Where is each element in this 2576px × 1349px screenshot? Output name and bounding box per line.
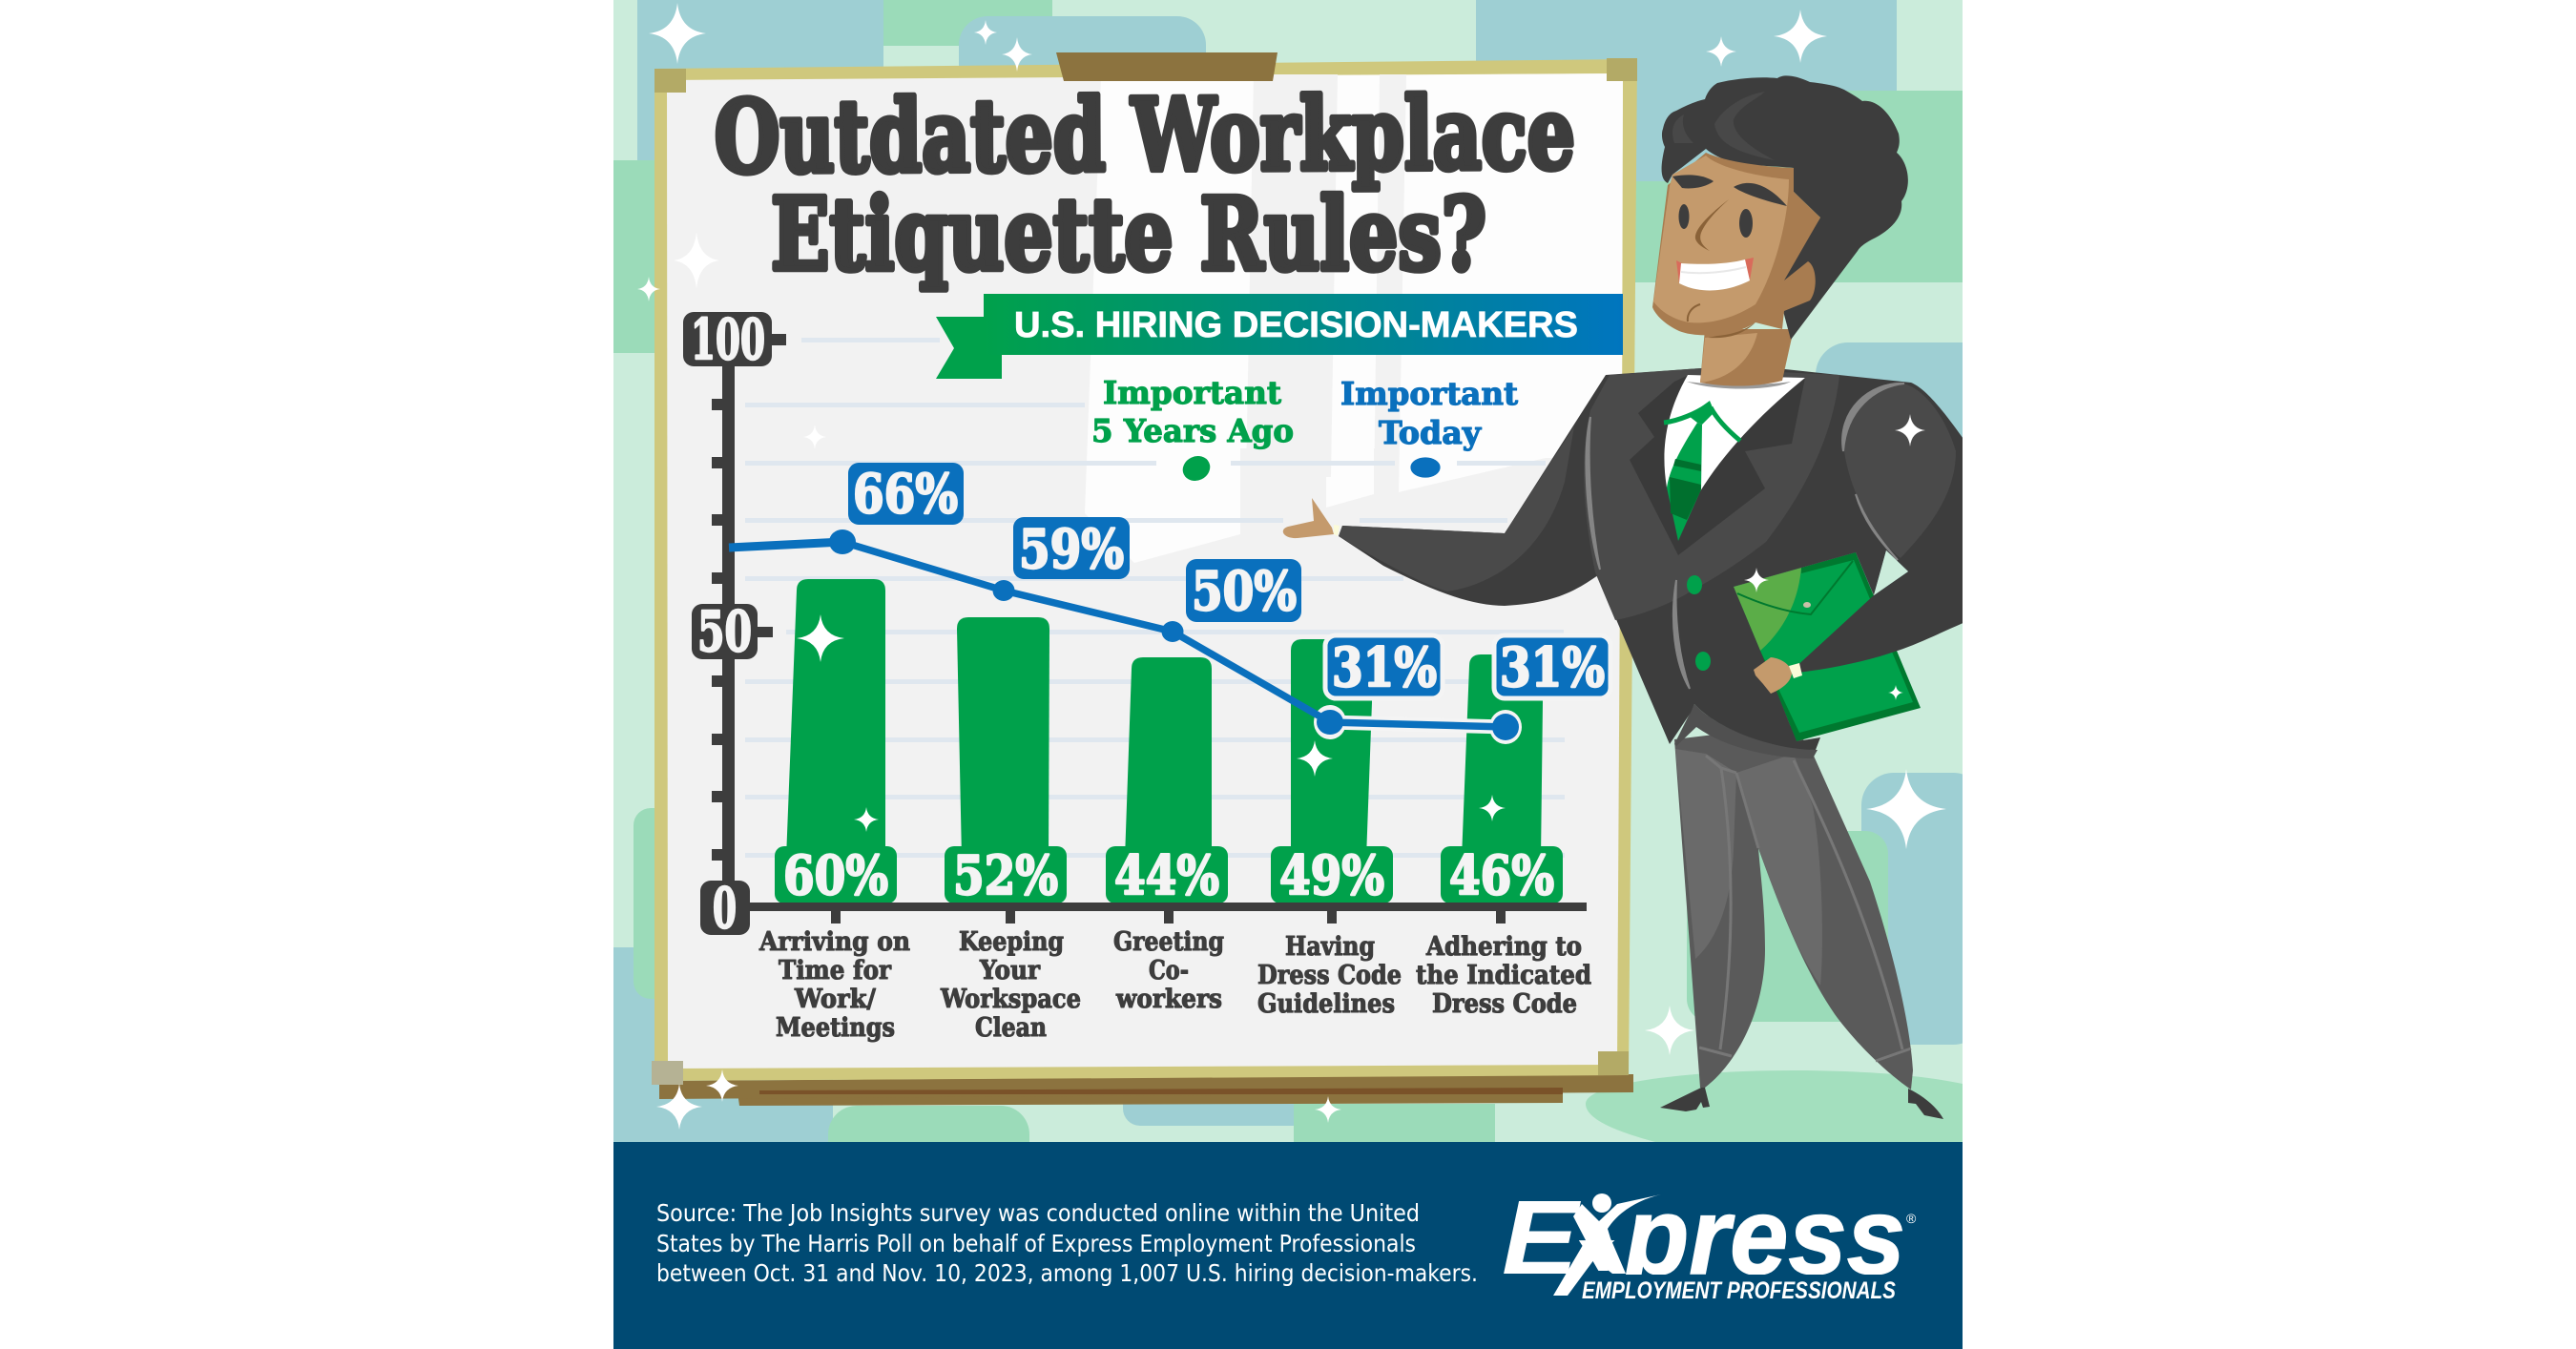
bar: keeping workspace clean: 52%: [953, 844, 1058, 907]
Express logo: E: [1502, 1179, 1582, 1297]
sparkles: [637, 3, 1946, 1130]
eyes: [1679, 204, 1753, 238]
legend: [1091, 374, 1519, 485]
label: greeting co-workers: Co-: [1149, 956, 1189, 986]
bar: adhering to dress code: 46%: [1449, 844, 1554, 907]
line series: important today: [729, 529, 1522, 744]
source text: between Oct. 31 and Nov. 10, 2023, among 1,007 U.S. hiring decision-makers.: [656, 1259, 1478, 1287]
Express logo: ®: [1906, 1211, 1917, 1226]
label: keeping workspace clean: Workspace: [940, 985, 1081, 1014]
label: keeping workspace clean: Keeping: [959, 927, 1064, 957]
banner: U.S. hiring decision-makers: [936, 294, 1623, 379]
nose: [1695, 199, 1729, 251]
shoes: [1660, 1088, 1943, 1119]
label: having dress code guidelines: Having: [1285, 932, 1375, 962]
label: greeting co-workers: workers: [1115, 985, 1222, 1014]
legend: important today: Important: [1340, 375, 1519, 412]
jacket buttons: [1687, 575, 1711, 671]
label: keeping workspace clean: Your: [979, 956, 1041, 986]
label: keeping workspace clean: Clean: [975, 1013, 1047, 1043]
board frame: [652, 58, 1637, 1085]
title: [715, 74, 1575, 293]
jacket: [1339, 368, 1965, 750]
source text: Source: The Job Insights survey was conducted online within the United: [656, 1199, 1420, 1227]
legend: important today: Today: [1379, 414, 1482, 451]
value label 31% second: 31%: [1500, 636, 1605, 699]
bar: arriving on time: 60%: [783, 844, 888, 907]
legend: important 5 years ago: Important: [1103, 374, 1282, 411]
eyebrows: [1672, 175, 1787, 206]
smile: [1676, 258, 1754, 290]
axis label 0: 0: [713, 876, 737, 941]
label: greeting co-workers: Greeting: [1113, 927, 1224, 957]
label: adhering to indicated dress code: Dress Code: [1432, 989, 1577, 1019]
axis label 50: 50: [697, 599, 752, 664]
folder: [1734, 552, 1921, 741]
Express logo: press: [1622, 1176, 1905, 1297]
Express logo: [1504, 1193, 1916, 1298]
bar: having dress code guidelines: [1271, 639, 1393, 907]
Express logo: EMPLOYMENT PROFESSIONALS: [1582, 1277, 1896, 1304]
label: having dress code guidelines: Guidelines: [1257, 989, 1395, 1019]
label: arriving on time: [758, 927, 910, 1043]
value label 31% first: 31%: [1332, 636, 1437, 699]
hair sheen: [1672, 92, 1775, 160]
bar: greeting co-workers: [1106, 657, 1228, 907]
board clip: [1056, 52, 1278, 81]
board tray: [659, 1074, 1633, 1106]
x axis: [745, 903, 1587, 924]
bar: keeping workspace clean: [945, 617, 1067, 907]
axis label 100: 100: [691, 307, 765, 372]
grid lines: [745, 338, 1565, 858]
y axis: [683, 307, 786, 941]
label: arriving on time: Arriving on: [758, 927, 910, 957]
label: keeping workspace clean: [940, 927, 1081, 1043]
background panel: [613, 0, 2006, 1173]
legend: important 5 years ago: 5 Years Ago: [1091, 412, 1294, 449]
source text: [656, 1199, 1478, 1287]
bar: greeting co-workers: 44%: [1114, 844, 1219, 907]
logo figure x: x: [1570, 1219, 1615, 1283]
source text: States by The Harris Poll on behalf of Express Employment Professionals: [656, 1230, 1416, 1257]
holding hand: [1754, 657, 1802, 694]
label: adhering to indicated dress code: [1416, 932, 1591, 1019]
hair: [1662, 75, 1908, 340]
title: Outdated Workplace: [715, 74, 1575, 196]
label: arriving on time: Work/: [794, 985, 876, 1014]
neck: [1687, 329, 1794, 389]
banner: U.S. hiring decision-makers: U.S. HIRING DECISION-MAKERS: [1014, 305, 1578, 345]
label: adhering to indicated dress code: the Indicated: [1416, 961, 1591, 990]
label: adhering to indicated dress code: Adhering to: [1425, 932, 1582, 962]
label: arriving on time: Meetings: [776, 1013, 895, 1043]
label: greeting co-workers: [1113, 927, 1224, 1014]
label: having dress code guidelines: [1257, 932, 1402, 1019]
bar: adhering to dress code: [1441, 654, 1563, 907]
bar: having dress code guidelines: 49%: [1279, 844, 1384, 907]
pointing hand: [1283, 498, 1340, 538]
legend: important 5 years ago: [1091, 374, 1294, 485]
footer band: [613, 1142, 1963, 1349]
head: [1652, 153, 1820, 338]
label: having dress code guidelines: Dress Code: [1257, 961, 1402, 990]
value label 66%: 66%: [853, 463, 958, 526]
legend: important today: [1340, 375, 1519, 477]
light gap between arm and body: [1874, 550, 1908, 595]
bar: arriving on time: [775, 579, 897, 907]
shirt and tie: [1664, 375, 1805, 541]
label: arriving on time: Time for: [779, 956, 892, 986]
value label 50%: 50%: [1192, 560, 1297, 623]
category labels: [758, 927, 1591, 1043]
logo figure x: [1553, 1193, 1661, 1296]
trousers: [1674, 704, 1913, 1090]
presenter character: [1283, 75, 1965, 1119]
title: Etiquette Rules?: [771, 176, 1486, 293]
value label 59%: 59%: [1019, 518, 1124, 581]
axis label 100: [683, 307, 772, 372]
